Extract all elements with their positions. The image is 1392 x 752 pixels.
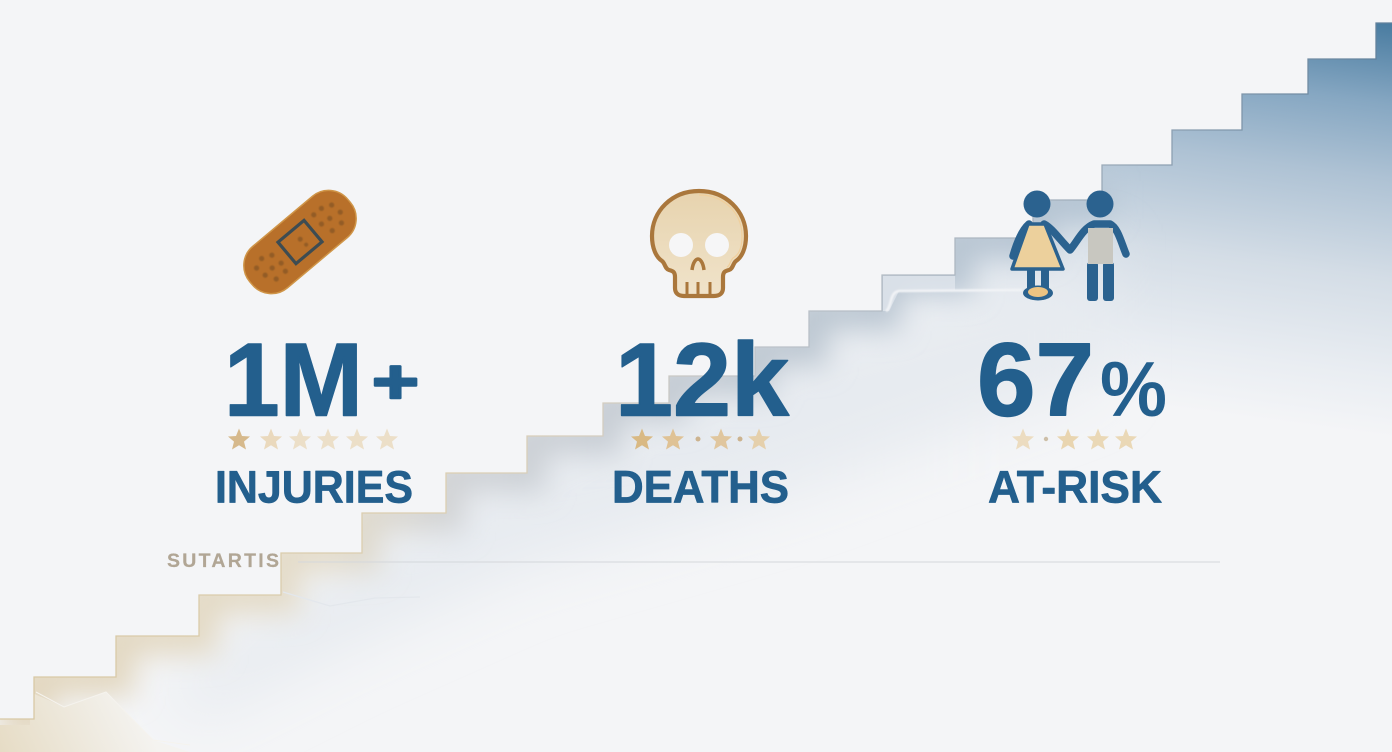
label: injuries: INJURIES (215, 462, 413, 512)
stars: injuries (228, 428, 398, 450)
icon: skull (652, 191, 746, 296)
dress (1012, 224, 1063, 269)
fold: bottom left paper (0, 692, 190, 752)
arms (1013, 224, 1029, 256)
stat: deaths (612, 191, 789, 512)
number: 1M+: + (372, 348, 419, 417)
number: 67%: % (1100, 345, 1167, 433)
number: 12k: 12k (615, 322, 789, 438)
number: 1M+: 1M (224, 322, 363, 438)
fold: small crease near start (283, 592, 304, 598)
icon: two people (1012, 190, 1126, 301)
stars: at-risk (1012, 428, 1137, 450)
legs (1027, 268, 1035, 292)
stars: deaths (631, 428, 770, 450)
icon: bandage (234, 180, 366, 304)
label: deaths: DEATHS (612, 462, 789, 512)
inner ledge highlight (886, 290, 1022, 311)
label: at-risk: AT-RISK (988, 462, 1162, 512)
number: 67% (977, 322, 1167, 438)
label: SUTARTIS: SUTARTIS (167, 550, 279, 572)
number: 67%: 67 (977, 322, 1094, 438)
stat: at-risk (977, 190, 1167, 512)
torso (1088, 228, 1113, 264)
lighter ledge panel (883, 276, 955, 311)
stat: injuries (215, 180, 419, 512)
